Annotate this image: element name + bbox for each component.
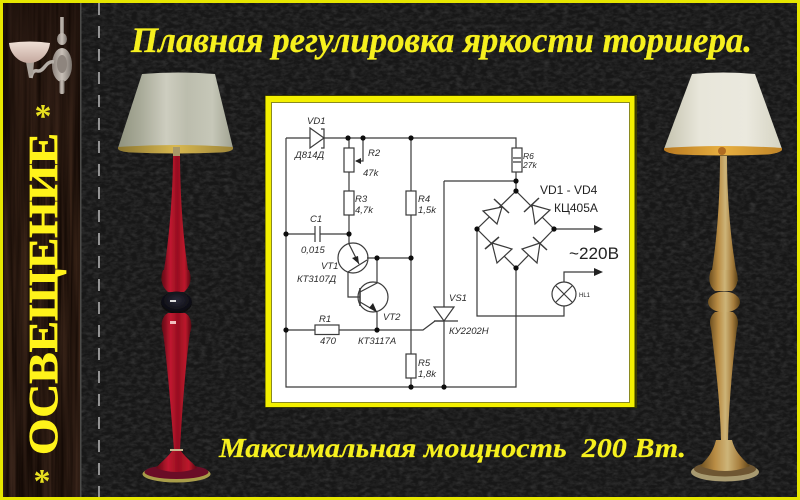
component labels: КТ3117А xyxy=(358,336,396,347)
component labels: 470 xyxy=(320,336,337,347)
title: Плавная регулировка яркости торшера. xyxy=(130,20,752,60)
component labels: R5 xyxy=(418,358,431,369)
component labels: КТ3107Д xyxy=(297,274,337,285)
circuit schematic xyxy=(283,116,619,390)
vertical heading: ОСВЕЩЕНИЕ xyxy=(20,133,66,455)
component labels: R6 xyxy=(523,151,534,161)
component labels: 27k xyxy=(522,160,537,170)
component labels: КУ2202Н xyxy=(449,326,489,337)
component labels xyxy=(294,116,619,380)
decorative asterisk top: * xyxy=(34,98,52,135)
component labels: 4,7k xyxy=(355,205,374,216)
component labels: HL1 xyxy=(579,293,591,299)
component labels: VS1 xyxy=(449,293,467,304)
component: lamp HL1 xyxy=(552,282,576,306)
stitching line xyxy=(98,3,100,497)
component labels: VD1 xyxy=(307,116,325,127)
decorative asterisk bottom: * xyxy=(34,463,50,500)
panel: wooden side strip xyxy=(3,3,82,497)
icon: wall sconce xyxy=(9,17,72,94)
component labels: C1 xyxy=(310,214,322,225)
component labels: 47k xyxy=(363,168,380,179)
caption: maximum power: Максимальная мощность 200 Вт. xyxy=(218,433,686,463)
junction dots xyxy=(283,135,557,390)
component labels: 1,8k xyxy=(418,369,437,380)
component labels: R1 xyxy=(319,314,331,325)
lamp: red floor lamp xyxy=(118,72,233,482)
component labels: R3 xyxy=(355,194,368,205)
component: thyristor VS1 xyxy=(434,307,458,321)
component: resistors xyxy=(315,148,522,378)
component labels: VT1 xyxy=(321,261,338,272)
component labels: 0,015 xyxy=(301,245,325,256)
lamp: amber floor lamp xyxy=(664,72,782,482)
component labels: R4 xyxy=(418,194,430,205)
component labels: Д814Д xyxy=(294,150,325,161)
component labels: КЦ405А xyxy=(554,201,598,215)
component labels: R2 xyxy=(368,148,381,159)
component labels: VD1 - VD4 xyxy=(540,183,598,197)
component labels: 1,5k xyxy=(418,205,437,216)
component labels: ~220В xyxy=(569,244,619,263)
component labels: VT2 xyxy=(383,312,401,323)
panel: circuit diagram frame xyxy=(265,95,637,408)
component: diode bridge VD1-VD4 xyxy=(477,191,603,316)
component: diode VD1 xyxy=(310,128,324,148)
